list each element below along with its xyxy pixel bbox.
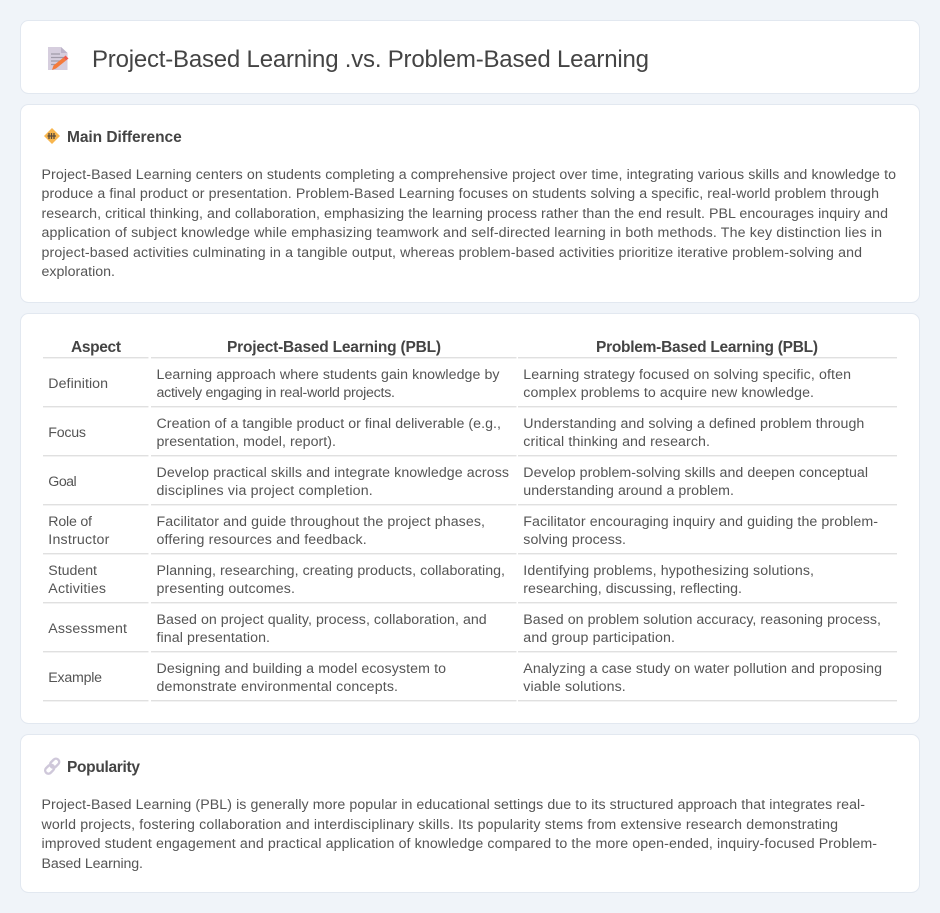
row: definition: Learning strategy focused on solving specific, often	[523, 367, 851, 383]
table header: Aspect	[71, 339, 121, 356]
row: focus: presentation, model, report).	[156, 434, 336, 450]
row: student activities: presenting outcomes.	[156, 581, 295, 597]
text block: popularity	[40, 797, 877, 872]
row: assessment: Based on project quality, process, collaboration, and	[156, 612, 487, 628]
text block: main difference: produce a final product or presentation. Problem-Based Learning focuses on students solving a specific, real-world problem through	[42, 186, 879, 202]
table header: Project-Based Learning (PBL)	[227, 339, 441, 356]
row: role of instructor: Instructor	[48, 532, 110, 548]
heading: popularity: Popularity	[67, 759, 140, 776]
row: goal	[43, 465, 897, 505]
row: definition: Definition	[48, 376, 108, 392]
icon: memo with pencil	[48, 47, 68, 70]
icon: chain link	[44, 757, 61, 775]
text block: main difference	[42, 167, 896, 280]
row: student activities: Activities	[48, 581, 106, 597]
row: focus: critical thinking and research.	[523, 434, 710, 450]
text block: main difference: application of subject knowledge while emphasizing teamwork and self-directed learning in both methods. The key distinction lies in	[42, 225, 882, 241]
panel: title card	[20, 20, 920, 94]
row: example	[43, 661, 897, 701]
title: Project-Based Learning .vs. Problem-Based Learning	[92, 46, 649, 73]
row: role of instructor: Role of	[48, 514, 92, 530]
row: goal: Develop practical skills and integrate knowledge across	[156, 465, 509, 481]
row: assessment: Assessment	[48, 621, 127, 637]
row: student activities	[43, 563, 897, 603]
row: example: viable solutions.	[523, 679, 626, 695]
row: role of instructor: Facilitator and guide throughout the project phases,	[156, 514, 485, 530]
row: role of instructor: offering resources and feedback.	[156, 532, 367, 548]
row: goal: Develop problem-solving skills and deepen conceptual	[523, 465, 868, 481]
row: assessment: and group participation.	[523, 630, 675, 646]
row: definition	[43, 367, 897, 407]
row: student activities: Identifying problems, hypothesizing solutions,	[523, 563, 814, 579]
row: assessment	[43, 612, 897, 652]
icon: diamond sign	[44, 128, 60, 144]
text block: popularity: Project-Based Learning (PBL) is generally more popular in educational settings due to its structured approach that integrates real-	[42, 797, 865, 813]
row: role of instructor: Facilitator encouraging inquiry and guiding the problem-	[523, 514, 878, 530]
row: role of instructor: solving process.	[523, 532, 626, 548]
table header: Problem-Based Learning (PBL)	[596, 339, 818, 356]
text block: main difference: research, critical thinking, and collaboration, emphasizing the learning process rather than the end result. PBL encourages inquiry and	[42, 206, 888, 222]
panel: comparison table	[20, 314, 920, 724]
row: example: Example	[48, 670, 102, 686]
row: definition: complex problems to acquire new knowledge.	[523, 385, 814, 401]
row: goal: understanding around a problem.	[523, 483, 734, 499]
row: role of instructor	[43, 514, 897, 554]
row: goal: Goal	[48, 474, 77, 490]
row: focus: Focus	[48, 425, 86, 441]
row: focus: Creation of a tangible product or final deliverable (e.g.,	[156, 416, 501, 432]
row: example: demonstrate environmental concepts.	[156, 679, 398, 695]
row: definition: actively engaging in real-world projects.	[156, 385, 395, 401]
heading: main difference: Main Difference	[67, 129, 182, 146]
text block: popularity: world projects, fostering collaboration and interdisciplinary skills. Its popularity stems from extensive research demonstrating	[40, 817, 838, 833]
row: focus	[43, 416, 897, 456]
row: assessment: final presentation.	[156, 630, 270, 646]
row: assessment: Based on problem solution accuracy, reasoning process,	[523, 612, 881, 628]
panel: popularity	[20, 734, 920, 892]
row: example: Designing and building a model ecosystem to	[156, 661, 446, 677]
table header	[43, 339, 897, 358]
text block: main difference: exploration.	[42, 264, 115, 280]
row: focus: Understanding and solving a defined problem through	[523, 416, 864, 432]
row: goal: disciplines via project completion.	[156, 483, 373, 499]
text block: popularity: improved student engagement and practical application of knowledge compared to the more open-ended, inquiry-focused Problem-	[42, 836, 877, 852]
row: example: Analyzing a case study on water pollution and proposing	[523, 661, 882, 677]
panel: main difference	[20, 104, 920, 302]
row: student activities: Planning, researching, creating products, collaborating,	[156, 563, 505, 579]
row: student activities: Student	[48, 563, 97, 579]
row: definition: Learning approach where students gain knowledge by	[156, 367, 500, 383]
text block: popularity: Based Learning.	[42, 856, 143, 872]
row: student activities: researching, discussing, reflecting.	[523, 581, 742, 597]
text block: main difference: project-based activities culminating in a tangible output, whereas problem-based activities prioritize iterative problem-solving and	[42, 245, 862, 261]
text block: main difference: Project-Based Learning centers on students completing a comprehensive project over time, integrating various skills and knowledge to	[42, 167, 896, 183]
